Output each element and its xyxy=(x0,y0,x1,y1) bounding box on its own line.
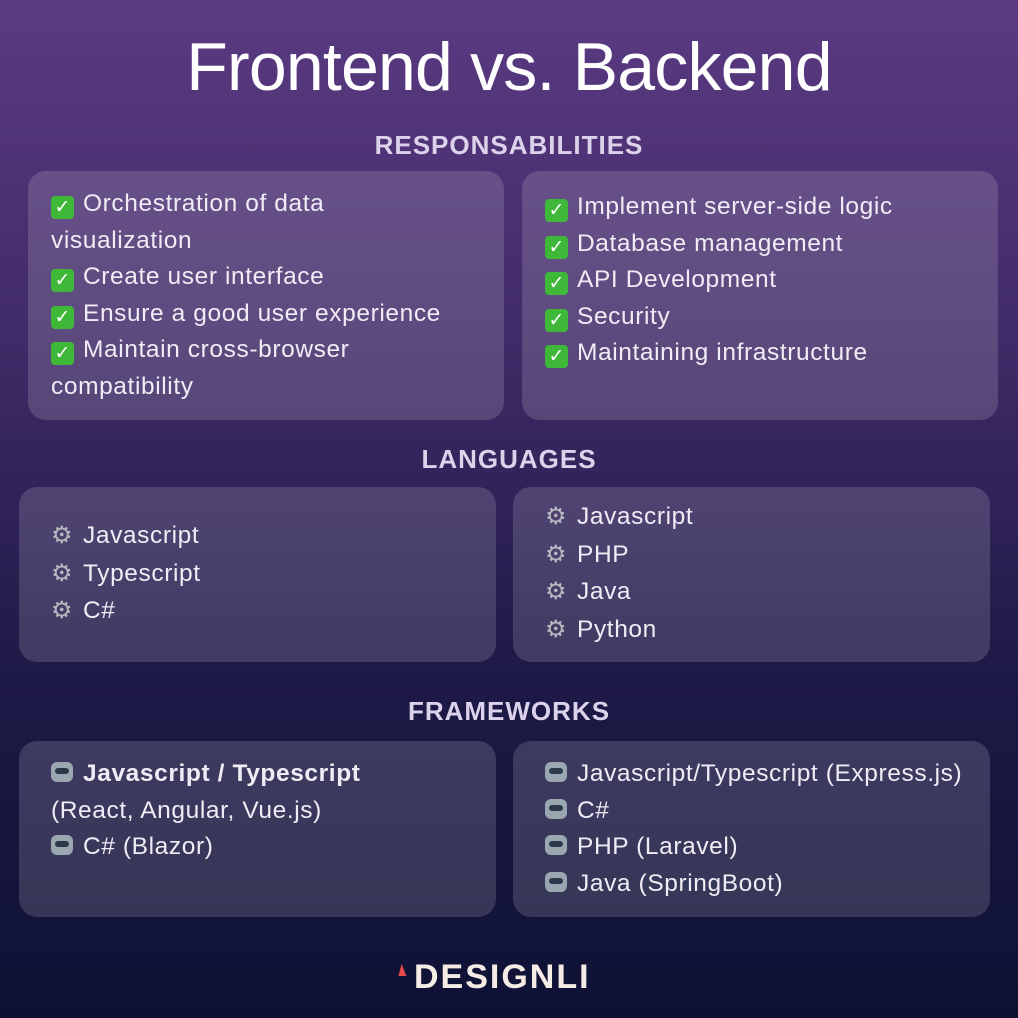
text: backend languages: Java xyxy=(577,578,631,605)
text: frontend languages: ⚙ xyxy=(51,596,73,624)
text: frontend frameworks xyxy=(51,760,361,860)
text: backend languages: Javascript xyxy=(577,503,693,530)
text: frontend responsibilities: Create user interface xyxy=(83,263,324,290)
text: frontend responsibilities: Orchestration of data xyxy=(83,190,324,217)
text: backend languages: ⚙ xyxy=(545,540,567,568)
text: backend frameworks: Java (SpringBoot) xyxy=(577,870,783,897)
panel: frontend languages xyxy=(19,487,496,662)
panel: backend languages xyxy=(513,487,990,662)
text: backend frameworks: C# xyxy=(577,797,610,824)
heading: frameworks: FRAMEWORKS xyxy=(408,696,610,726)
text: frontend languages: ⚙ xyxy=(51,559,73,587)
panel: frontend frameworks xyxy=(19,741,496,917)
text: frontend frameworks: C# (Blazor) xyxy=(83,833,214,860)
text: backend responsibilities: ✓ xyxy=(549,200,564,221)
text: frontend languages: Javascript xyxy=(83,522,199,549)
text: frontend frameworks: Javascript / Typescript xyxy=(83,760,361,787)
text: frontend responsibilities: ✓ xyxy=(55,270,70,291)
text: frontend languages: ⚙ xyxy=(51,521,73,549)
text: frontend responsibilities xyxy=(51,190,441,400)
text: backend responsibilities xyxy=(545,193,893,368)
text: backend responsibilities: Maintaining infrastructure xyxy=(577,339,868,366)
text: backend languages: Python xyxy=(577,616,657,643)
text: frontend responsibilities: ✓ xyxy=(55,343,70,364)
text: backend languages: ⚙ xyxy=(545,502,567,530)
text: frontend responsibilities: ✓ xyxy=(55,307,70,328)
text: backend responsibilities: Database management xyxy=(577,230,843,257)
text: frontend responsibilities: Ensure a good user experience xyxy=(83,300,441,327)
text: frontend frameworks: (React, Angular, Vue.js) xyxy=(51,797,322,824)
text: backend languages: PHP xyxy=(577,541,629,568)
heading: responsabilities: RESPONSABILITIES xyxy=(375,130,643,160)
text: frontend responsibilities: ✓ xyxy=(55,197,70,218)
title: Frontend vs. Backend xyxy=(186,29,832,105)
text: backend frameworks: PHP (Laravel) xyxy=(577,833,738,860)
text: backend responsibilities: ✓ xyxy=(549,310,564,331)
panel: frontend responsibilities xyxy=(28,171,504,420)
panel: backend responsibilities xyxy=(522,171,998,420)
panel: backend frameworks xyxy=(513,741,990,917)
text: frontend responsibilities: visualization xyxy=(51,227,192,254)
text: backend responsibilities: ✓ xyxy=(549,237,564,258)
heading: languages: LANGUAGES xyxy=(421,444,597,474)
text: backend responsibilities: ✓ xyxy=(549,273,564,294)
text: backend languages xyxy=(545,502,693,643)
text: frontend languages: C# xyxy=(83,597,116,624)
text: backend responsibilities: Security xyxy=(577,303,670,330)
text: frontend languages: Typescript xyxy=(83,560,201,587)
text: frontend languages xyxy=(51,521,201,624)
text: backend responsibilities: Implement server-side logic xyxy=(577,193,893,220)
text: backend frameworks xyxy=(545,760,962,897)
text: frontend responsibilities: compatibility xyxy=(51,373,194,400)
text: frontend responsibilities: Maintain cross-browser xyxy=(83,336,349,363)
text: backend languages: ⚙ xyxy=(545,615,567,643)
logo: DESIGNLI xyxy=(414,958,591,996)
text: backend responsibilities: ✓ xyxy=(549,346,564,367)
text: backend languages: ⚙ xyxy=(545,577,567,605)
text: backend frameworks: Javascript/Typescript (Express.js) xyxy=(577,760,962,787)
text: backend responsibilities: API Development xyxy=(577,266,777,293)
